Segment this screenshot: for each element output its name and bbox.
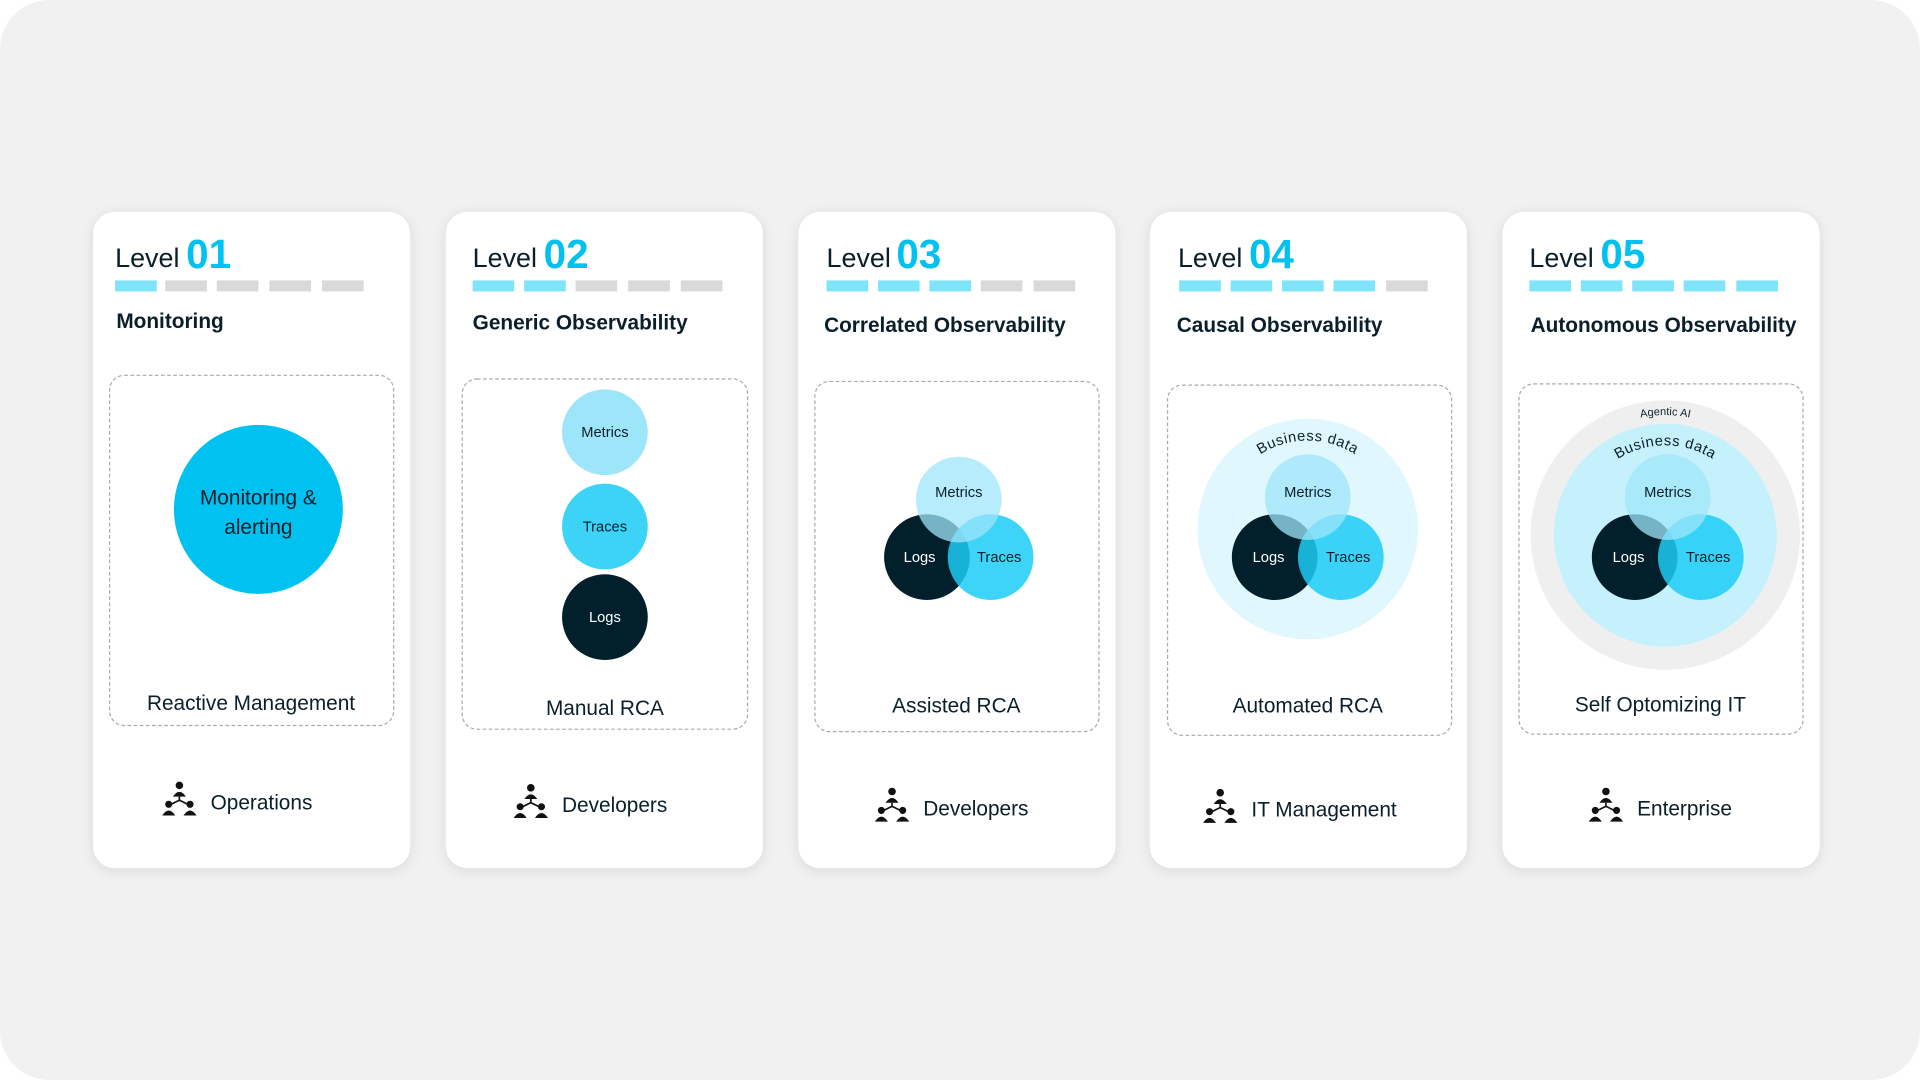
role: Developers (923, 798, 1028, 821)
business data circle (1554, 424, 1777, 646)
role (514, 784, 667, 818)
venn diagram (1592, 454, 1744, 600)
venn diagram: Metrics (1644, 485, 1691, 501)
card: level 03 (798, 212, 1116, 868)
heading: level 05: 05 (1600, 231, 1645, 277)
role (1203, 789, 1397, 823)
circles: Metrics (581, 425, 629, 441)
panel (815, 381, 1099, 732)
role: Operations (211, 791, 312, 814)
heading: level 01 (115, 231, 231, 277)
venn diagram: Logs (904, 550, 936, 566)
panel (1518, 383, 1804, 735)
heading: level 01: 01 (186, 231, 231, 277)
card: level 01 (93, 212, 410, 868)
panel (110, 375, 394, 726)
heading: level 03: Level (827, 243, 891, 273)
heading: level 05 (1529, 231, 1645, 277)
heading: level 02: 02 (544, 231, 589, 277)
label: Manual RCA (546, 697, 664, 720)
label: Automated RCA (1233, 695, 1383, 718)
progress bar (1529, 280, 1778, 291)
title: Monitoring (116, 310, 224, 333)
venn diagram: Traces (977, 550, 1021, 566)
heading: level 04 (1178, 231, 1294, 277)
business data circle: Business data (1614, 437, 1714, 459)
card: level 05 (1500, 212, 1822, 874)
title: Correlated Observability (824, 314, 1066, 337)
label: Reactive Management (147, 692, 355, 715)
label: Assisted RCA (892, 695, 1021, 718)
venn diagram: Traces (1326, 550, 1370, 566)
label: Self Optomizing IT (1575, 693, 1746, 716)
heading: level 03 (827, 231, 941, 277)
heading: level 04: 04 (1249, 231, 1294, 277)
venn diagram: Traces (1686, 550, 1730, 566)
circle: monitoring & alerting (174, 425, 343, 594)
title: Autonomous Observability (1531, 314, 1797, 337)
card: level 02 (446, 212, 763, 868)
heading: level 01: Level (115, 243, 179, 273)
circles (562, 389, 648, 660)
role: Developers (562, 794, 667, 817)
heading: level 02: Level (473, 243, 537, 273)
business data circle (1198, 418, 1418, 639)
agentic AI ring: Agentic AI (1640, 407, 1690, 418)
panel (462, 379, 748, 729)
title: Generic Observability (473, 311, 688, 334)
progress bar (473, 280, 722, 291)
venn diagram (1232, 454, 1384, 600)
progress bar (827, 280, 1075, 291)
venn diagram: Metrics (935, 485, 982, 501)
venn diagram: Metrics (1284, 485, 1331, 501)
agentic AI ring (1530, 400, 1800, 670)
circle: monitoring & alerting: Monitoring & (200, 486, 317, 509)
card: level 04 (1147, 212, 1470, 874)
heading: level 03: 03 (896, 231, 941, 277)
role: IT Management (1251, 799, 1397, 822)
circles: Traces (583, 519, 627, 535)
role (1589, 788, 1732, 822)
progress bar (115, 280, 364, 291)
role (875, 788, 1028, 822)
role (162, 782, 312, 816)
progress bar (1179, 280, 1428, 291)
heading: level 02 (473, 231, 589, 277)
circles: Logs (589, 610, 621, 626)
role: Enterprise (1637, 798, 1732, 821)
heading: level 05: Level (1529, 243, 1594, 273)
venn diagram: Logs (1253, 550, 1285, 566)
business data circle: Business data (1256, 432, 1357, 454)
panel (1166, 384, 1452, 736)
venn diagram: Logs (1613, 550, 1645, 566)
venn diagram (884, 457, 1033, 600)
heading: level 04: Level (1178, 243, 1242, 273)
circle: monitoring & alerting: alerting (224, 516, 292, 539)
title: Causal Observability (1177, 314, 1383, 337)
